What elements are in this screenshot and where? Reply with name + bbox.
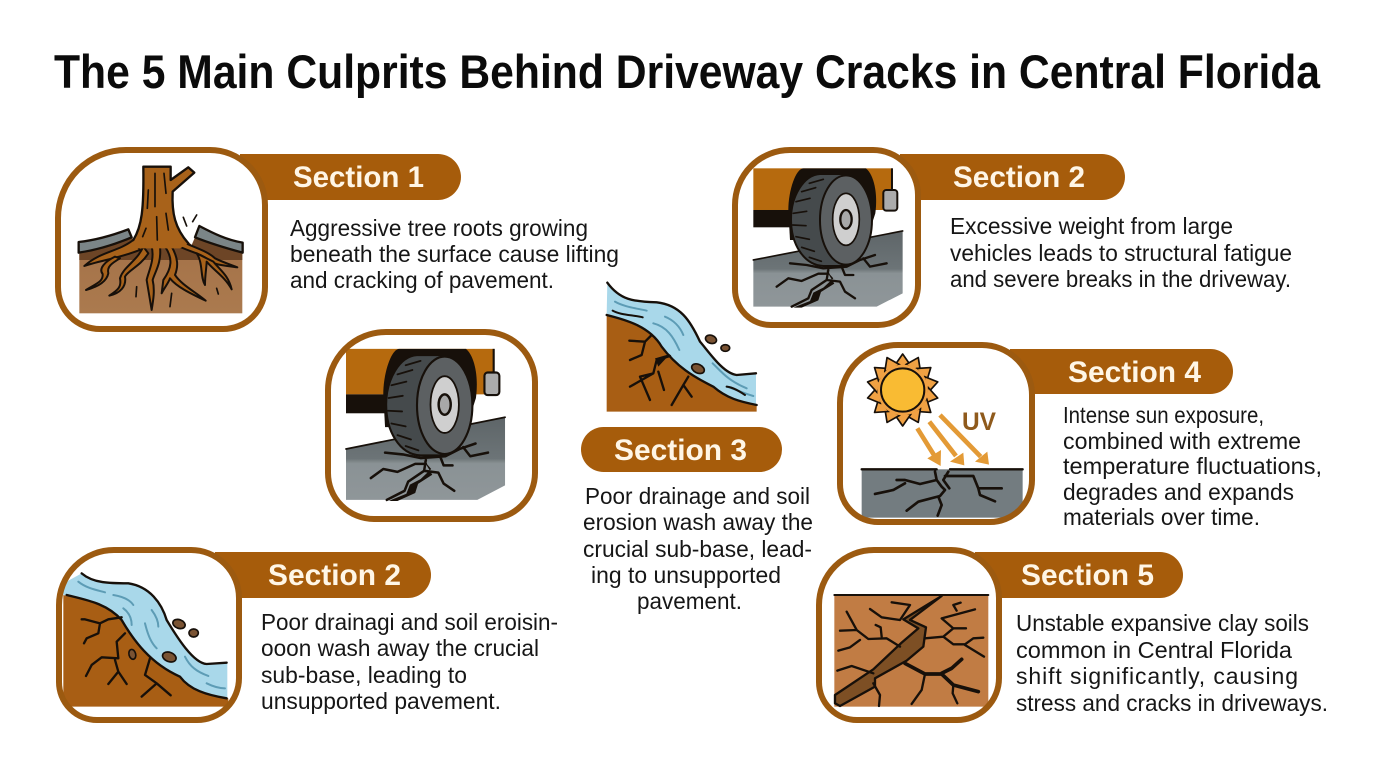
text: bottom-left section 2 description <box>261 609 558 714</box>
text: section 5 description: shift significantly, causing <box>1016 663 1298 689</box>
icon: water eroding soil <box>607 283 757 412</box>
icon frame: second tire on cracked pavement <box>328 332 535 519</box>
text: section 3 description: Poor drainage and soil <box>585 483 810 509</box>
icon frame: tree roots <box>58 150 265 329</box>
text: bottom-left section 2 description: unsupported pavement. <box>261 688 501 714</box>
text: bottom-left section 2 description: sub-base, leading to <box>261 662 467 688</box>
text: section 5 description: Unstable expansive clay soils <box>1016 610 1309 636</box>
heading pill: section 5 <box>975 552 1183 598</box>
heading pill: section 3 <box>581 427 782 472</box>
text: bottom-left section 2 description: Poor drainagi and soil eroisin- <box>261 609 558 635</box>
text: section 3 description: erosion wash away the <box>583 509 813 535</box>
panel: section 4 sun and UV <box>840 345 1322 530</box>
text: section 1 description: and cracking of pavement. <box>290 267 554 293</box>
text: section 3 description: pavement. <box>637 588 742 614</box>
text: section 3 description <box>583 483 813 614</box>
text: section 3 description: crucial sub-base, lead- <box>583 536 812 562</box>
panel: section 5 clay soil <box>819 550 1328 720</box>
panel: section 3 drainage and erosion <box>581 283 813 614</box>
text: section 3 description: ing to unsupported <box>591 562 781 588</box>
icon frame: tire on cracked pavement <box>735 150 918 325</box>
heading pill: section 2 <box>900 154 1125 200</box>
text: section 2 description: Excessive weight from large <box>950 213 1233 239</box>
heading pill: section 4: Section 4 <box>1068 356 1201 389</box>
heading pill: bottom-left section 2: Section 2 <box>268 559 401 592</box>
text: section 1 description: Aggressive tree roots growing <box>290 215 588 241</box>
text: section 4 description: temperature fluctuations, <box>1063 453 1322 479</box>
text: section 2 description <box>950 213 1292 292</box>
text: section 4 description: degrades and expands <box>1063 479 1294 505</box>
panel: section 2 heavy vehicles <box>735 150 1292 325</box>
heading pill: section 1 <box>240 154 461 200</box>
heading pill: section 5: Section 5 <box>1021 559 1154 592</box>
text: section 4 description <box>1063 402 1322 530</box>
icon frame: sun, UV rays and cracked pavement <box>840 345 1032 522</box>
text: section 4 description: materials over time. <box>1063 504 1260 530</box>
text: section 1 description <box>290 215 619 293</box>
text: section 5 description: common in Central Florida <box>1016 637 1292 663</box>
text: section 4 description: Intense sun exposure, <box>1063 402 1264 428</box>
text: bottom-left section 2 description: ooon wash away the crucial <box>261 635 539 661</box>
heading pill: bottom-left section 2 <box>215 552 431 598</box>
icon frame: cracked clay soil <box>819 550 999 720</box>
heading pill: section 3: Section 3 <box>614 434 747 467</box>
text: section 4 description: combined with extreme <box>1063 428 1301 454</box>
text: section 2 description: vehicles leads to structural fatigue <box>950 240 1292 266</box>
heading pill: section 1: Section 1 <box>293 161 424 194</box>
text: section 5 description: stress and cracks in driveways. <box>1016 690 1328 716</box>
icon frame: water eroding soil <box>59 550 239 720</box>
icon frame: sun, UV rays and cracked pavement: UV <box>962 408 996 436</box>
text: section 2 description: and severe breaks in the driveway. <box>950 266 1291 292</box>
text: section 1 description: beneath the surface cause lifting <box>290 241 619 267</box>
heading pill: section 4 <box>1010 349 1233 394</box>
text: section 5 description <box>1016 610 1328 716</box>
panel: section 1 tree roots <box>58 150 619 329</box>
heading pill: section 2: Section 2 <box>953 161 1085 194</box>
panel: bottom-left section 2 drainage <box>59 550 558 720</box>
